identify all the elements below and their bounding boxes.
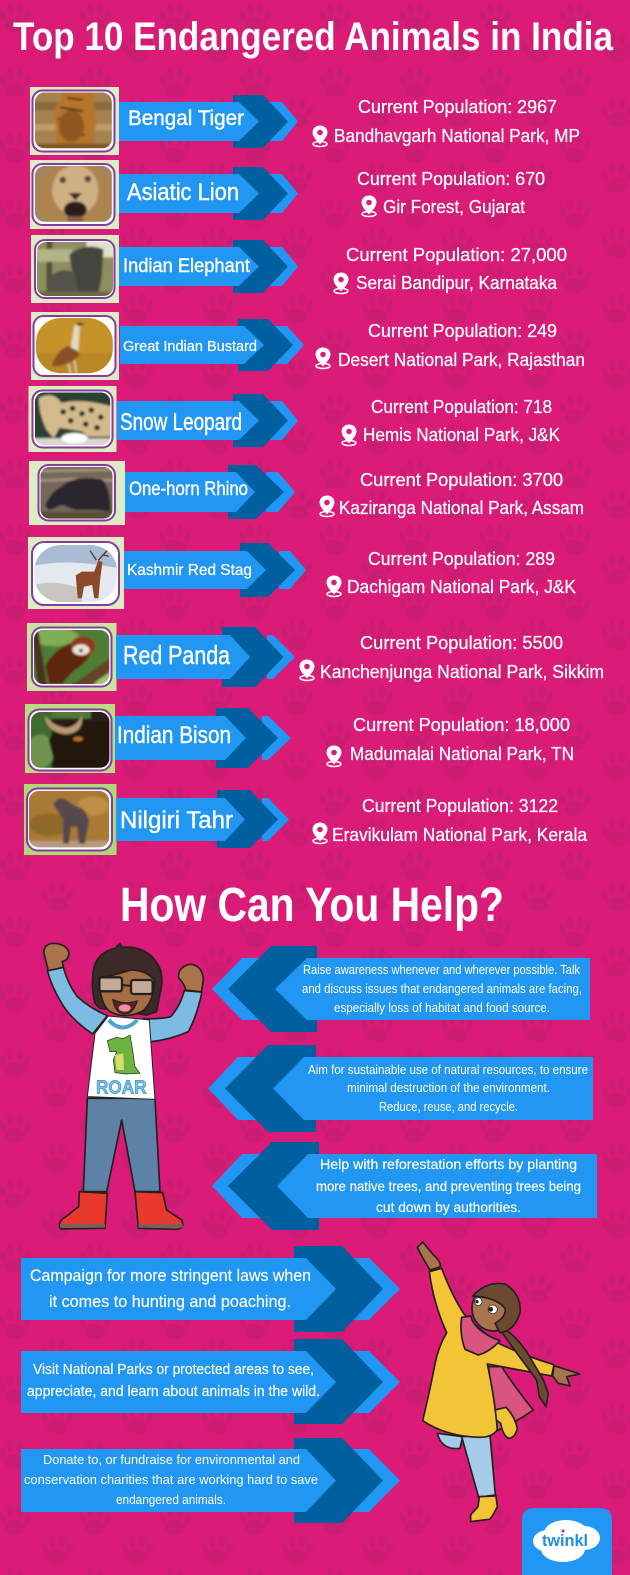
arrow label: Great Indian Bustard: Great Indian Bustard xyxy=(123,338,257,355)
arrow label: Red Panda: Red Panda xyxy=(123,640,230,670)
population: Great Indian Bustard: Current Population: 249 xyxy=(368,321,557,341)
illustration: boy with raised fists: ROAR xyxy=(96,1076,147,1097)
arrow label: Nilgiri Tahr: Nilgiri Tahr xyxy=(120,807,233,834)
help arrow: raise awareness xyxy=(212,946,590,1032)
location: Indian Elephant: Serai Bandipur, Karnataka xyxy=(356,273,558,293)
population: Indian Bison: Current Population: 18,000 xyxy=(353,715,570,735)
icon: location pin xyxy=(326,576,342,596)
help text: reforestation xyxy=(316,1156,581,1215)
help text: donate xyxy=(24,1452,318,1507)
help text: reforestation: cut down by authorities. xyxy=(376,1199,521,1215)
photo: elephant xyxy=(31,235,119,303)
photo: rhino xyxy=(29,461,125,525)
arrow label: Indian Bison xyxy=(115,708,291,768)
location: One-horn Rhino: Kaziranga National Park, Assam xyxy=(339,498,584,518)
row: Asiatic Lion xyxy=(30,160,545,229)
row: Indian Bison xyxy=(25,704,574,773)
logo: twinkl: twinkl xyxy=(542,1531,588,1550)
arrow label: Indian Elephant: Indian Elephant xyxy=(123,256,251,277)
location: Bengal Tiger: Bandhavgarh National Park, MP xyxy=(334,126,580,146)
population: Kashmir Red Stag: Current Population: 289 xyxy=(368,549,555,569)
row: Indian Elephant xyxy=(31,235,567,303)
icon: location pin xyxy=(320,496,334,516)
row: Red Panda xyxy=(27,623,604,691)
arrow label: One-horn Rhino xyxy=(125,465,295,519)
photo: bison xyxy=(25,704,115,773)
icon: location pin xyxy=(342,424,356,446)
icon: location pin xyxy=(300,660,314,680)
help text: sustainable use: Aim for sustainable use of natural resources, to ensure xyxy=(308,1063,588,1077)
arrow label: Snow Leopard xyxy=(117,394,298,447)
help text: donate: Donate to, or fundraise for environmental and xyxy=(43,1452,300,1467)
icon: location pin xyxy=(312,126,328,146)
help text: campaign xyxy=(30,1266,311,1311)
arrow label: Snow Leopard: Snow Leopard xyxy=(120,409,242,436)
population: Bengal Tiger: Current Population: 2967 xyxy=(358,97,557,117)
help text: visit parks: Visit National Parks or protected areas to see, xyxy=(33,1361,314,1378)
arrow label: Great Indian Bustard xyxy=(120,319,304,371)
arrow label: Indian Elephant xyxy=(119,240,298,293)
help text: sustainable use: Reduce, reuse, and recycle. xyxy=(379,1100,518,1114)
arrow label: Asiatic Lion: Asiatic Lion xyxy=(127,179,239,206)
icon: location pin xyxy=(312,822,328,844)
population: Nilgiri Tahr: Current Population: 3122 xyxy=(362,796,558,816)
icon: location pin xyxy=(362,196,376,216)
arrow label: Kashmir Red Stag xyxy=(124,543,306,597)
help text: reforestation: more native trees, and preventing trees being xyxy=(316,1178,581,1194)
photo: lion xyxy=(30,160,119,229)
help text: visit parks xyxy=(27,1361,320,1400)
arrow label: Red Panda xyxy=(116,627,295,687)
row: One-horn Rhino xyxy=(29,461,584,525)
help text: reforestation: Help with reforestation efforts by planting xyxy=(320,1156,577,1172)
arrow label: Bengal Tiger xyxy=(119,95,298,148)
illustration: dancing girl xyxy=(417,1242,580,1522)
icon: location pin xyxy=(326,746,342,766)
help arrow: sustainable use xyxy=(208,1045,593,1132)
help text: raise awareness: especially loss of habitat and food source. xyxy=(334,1001,550,1015)
location: Asiatic Lion: Gir Forest, Gujarat xyxy=(383,197,525,217)
row: Bengal Tiger xyxy=(30,87,580,155)
row: Great Indian Bustard xyxy=(31,312,585,380)
heading: How Can You Help?: How Can You Help? xyxy=(120,879,504,932)
location: Red Panda: Kanchenjunga National Park, Sikkim xyxy=(320,662,604,682)
arrow label: One-horn Rhino: One-horn Rhino xyxy=(129,479,248,500)
help arrow: reforestation xyxy=(212,1142,597,1230)
photo: red panda xyxy=(27,623,117,691)
help text: raise awareness: and discuss issues that endangered animals are facing, xyxy=(302,982,582,996)
help text: campaign: Campaign for more stringent laws when xyxy=(30,1266,311,1285)
arrow label: Bengal Tiger: Bengal Tiger xyxy=(128,107,244,130)
population: Red Panda: Current Population: 5500 xyxy=(360,633,563,653)
location: Nilgiri Tahr: Eravikulam National Park, Kerala xyxy=(332,825,588,845)
row: Snow Leopard xyxy=(28,386,560,452)
help arrow: campaign xyxy=(21,1246,400,1332)
row: Kashmir Red Stag xyxy=(28,537,576,609)
photo: red stag xyxy=(28,537,124,609)
help text: donate: conservation charities that are working hard to save xyxy=(24,1472,318,1487)
help text: raise awareness xyxy=(302,963,582,1015)
arrow label: Indian Bison: Indian Bison xyxy=(117,722,231,749)
population: Asiatic Lion: Current Population: 670 xyxy=(357,169,545,189)
photo: bustard xyxy=(31,312,119,380)
help arrow: visit parks xyxy=(21,1339,400,1424)
photo: tiger xyxy=(30,87,119,155)
population: Snow Leopard: Current Population: 718 xyxy=(371,397,552,417)
location: Indian Bison: Madumalai National Park, TN xyxy=(350,744,574,764)
photo: snow leopard xyxy=(28,386,116,452)
help text: raise awareness: Raise awareness whenever and wherever possible. Talk xyxy=(303,963,581,977)
help text: sustainable use xyxy=(308,1063,588,1114)
logo: twinkl xyxy=(522,1508,612,1575)
illustration: boy with raised fists xyxy=(44,943,203,1229)
help text: donate: endangered animals. xyxy=(116,1492,226,1507)
photo: tahr xyxy=(24,784,116,855)
help text: sustainable use: minimal destruction of the environment. xyxy=(347,1081,550,1095)
help text: visit parks: appreciate, and learn about animals in the wild. xyxy=(27,1383,320,1400)
help text: campaign: it comes to hunting and poaching. xyxy=(49,1292,291,1311)
location: Great Indian Bustard: Desert National Park, Rajasthan xyxy=(338,350,585,370)
population: One-horn Rhino: Current Population: 3700 xyxy=(360,470,563,490)
arrow label: Asiatic Lion xyxy=(119,167,298,220)
arrow label: Kashmir Red Stag: Kashmir Red Stag xyxy=(127,562,252,579)
icon: location pin xyxy=(316,348,330,368)
location: Kashmir Red Stag: Dachigam National Park, J&K xyxy=(347,577,576,597)
help arrow: donate xyxy=(21,1438,400,1523)
icon: location pin xyxy=(334,272,348,294)
row: Nilgiri Tahr xyxy=(24,784,588,855)
location: Snow Leopard: Hemis National Park, J&K xyxy=(363,425,560,445)
population: Indian Elephant: Current Population: 27,000 xyxy=(346,245,567,265)
arrow label: Nilgiri Tahr xyxy=(116,790,289,848)
